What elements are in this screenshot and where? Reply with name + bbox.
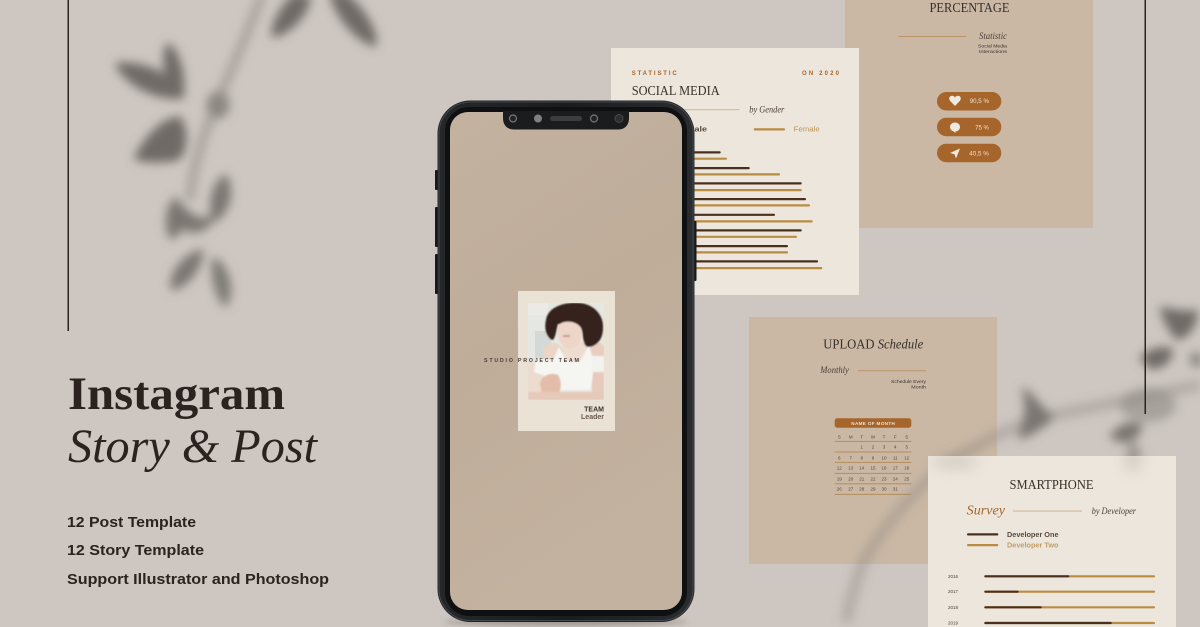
calendar dates: 10: [881, 455, 887, 460]
calendar dates: 4: [894, 445, 897, 450]
calendar dates: 6: [838, 455, 841, 460]
legend: [967, 530, 1059, 550]
photo: girl with curly hair: [528, 303, 605, 400]
calendar header: NAME OF MONTH: [851, 421, 895, 426]
calendar dates: F: [894, 434, 897, 439]
stacked bar chart: 2016: [948, 574, 959, 579]
story card: [484, 291, 615, 431]
calendar dates: 21: [859, 476, 865, 481]
phone notch: [503, 111, 629, 130]
calendar dates: T: [860, 434, 863, 439]
calendar dates: 1: [860, 445, 863, 450]
calendar dates: 18: [904, 466, 910, 471]
heading: percentage: PERCENTAGE: [930, 1, 1010, 16]
legend: Developer Two: [1007, 540, 1059, 550]
caption: schedule every month: Month: [911, 384, 926, 390]
calendar: [835, 418, 911, 495]
calendar dates: 5: [905, 445, 908, 450]
caption: social media interactions: [978, 44, 1008, 55]
calendar dates: 9: [872, 455, 875, 460]
label: statistic: STATISTIC: [632, 71, 677, 77]
caption: schedule every month: Schedule Every: [891, 379, 927, 385]
calendar dates: 28: [859, 487, 865, 492]
hair: [545, 303, 603, 347]
calendar dates: 29: [870, 487, 876, 492]
subheading: survey: Survey: [967, 504, 1006, 518]
heading: social media: SOCIAL MEDIA: [632, 84, 720, 99]
calendar dates: 23: [881, 476, 887, 481]
calendar dates: 7: [849, 455, 852, 460]
feature list: 12 Post Template: [67, 514, 196, 531]
stacked bar chart: [948, 574, 1155, 626]
calendar dates: 31: [893, 487, 898, 492]
calendar dates: 19: [837, 476, 842, 481]
label: on 2020: ON 2020: [802, 71, 840, 77]
caption: schedule every month: [891, 379, 927, 390]
calendar dates: W: [871, 434, 876, 439]
calendar dates: 24: [893, 476, 898, 481]
title: Story & Post: [68, 420, 319, 473]
shirt: [534, 345, 594, 390]
calendar dates: 16: [881, 466, 887, 471]
phone screen: [450, 112, 682, 610]
calendar dates: 25: [904, 476, 910, 481]
shoulders and arms: [543, 343, 563, 361]
feature list: [67, 514, 329, 588]
calendar dates: 22: [870, 476, 876, 481]
title: [68, 368, 319, 473]
label: studio project team: STUDIO PROJECT TEAM: [484, 358, 580, 364]
phone side buttons: [435, 170, 696, 294]
panel: smartphone survey: [928, 448, 1176, 627]
calendar dates: 8: [860, 455, 863, 460]
calendar dates: 26: [837, 487, 842, 492]
calendar dates: S: [838, 434, 841, 439]
calendar dates: S: [905, 434, 908, 439]
legend: Female: [794, 124, 820, 134]
calendar dates: [837, 434, 910, 492]
subheading: by gender: by Gender: [749, 106, 785, 116]
label: team leader: [581, 406, 604, 421]
heading: upload schedule: UPLOAD Schedule: [823, 338, 923, 352]
caption: social media interactions: Social Media: [978, 44, 1007, 50]
subheading: monthly: Monthly: [819, 366, 849, 376]
soft shadow on card: [931, 448, 1142, 472]
calendar dates: 20: [848, 476, 854, 481]
phone body: [438, 100, 694, 622]
vertical rule left: [68, 0, 69, 331]
calendar dates: 12: [837, 466, 842, 471]
panel: percentage: [845, 0, 1093, 228]
panel: social media by gender: [611, 48, 859, 295]
smartphone mockup: [435, 100, 696, 625]
calendar dates: 27: [848, 487, 854, 492]
stacked bar chart: 2018: [948, 605, 959, 610]
panel: upload schedule: [749, 317, 997, 564]
legend: Developer One: [1007, 530, 1058, 539]
calendar dates: 3: [883, 445, 886, 450]
heading: smartphone: SMARTPHONE: [1010, 478, 1094, 493]
stacked bar chart: 2019: [948, 620, 959, 626]
feature list: Support Illustrator and Photoshop: [67, 571, 329, 588]
pill: shares: [937, 144, 1001, 162]
label: team leader: Leader: [581, 414, 604, 421]
bar chart: [660, 151, 822, 269]
pill: comments: [937, 118, 1001, 136]
pill: likes: 90,5 %: [970, 98, 989, 105]
calendar dates: 2: [872, 445, 875, 450]
calendar dates: 30: [881, 487, 887, 492]
pill: comments: 75 %: [975, 124, 989, 132]
vertical rule right: [1144, 0, 1146, 414]
label: team leader: TEAM: [584, 406, 604, 414]
calendar dates: 12: [904, 455, 910, 460]
calendar dates: M: [849, 434, 853, 439]
pill: likes: [937, 92, 1001, 110]
calendar dates: T: [883, 434, 886, 439]
calendar dates: 11: [893, 455, 898, 460]
leaf shadow right: [846, 309, 1200, 622]
stacked bar chart: 2017: [948, 589, 959, 594]
legend: Male: [687, 124, 707, 134]
pill: shares: 40,5 %: [969, 150, 989, 158]
caption: social media interactions: Interactions: [979, 49, 1008, 55]
calendar dates: 17: [893, 466, 898, 471]
hands: [540, 374, 561, 396]
leaf shadow left: [118, 0, 374, 304]
legend: [687, 124, 820, 134]
subheading: statistic: Statistic: [979, 32, 1008, 42]
face: [557, 322, 582, 348]
calendar dates: 15: [870, 466, 876, 471]
title: Instagram: [68, 368, 285, 420]
calendar dates: 13: [848, 466, 854, 471]
feature list: 12 Story Template: [67, 542, 204, 559]
calendar dates: 14: [859, 466, 865, 471]
subheading: by developer: by Developer: [1092, 507, 1136, 517]
